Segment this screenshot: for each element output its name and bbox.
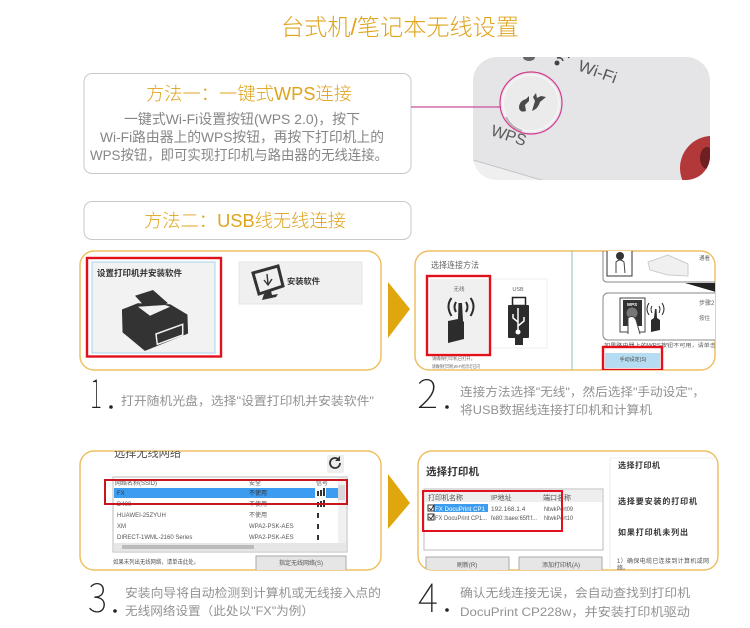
refresh button xyxy=(426,557,509,571)
step 3 caption: 安装向导将自动检测到计算机或无线接入点的 xyxy=(125,585,381,600)
step 1 caption: 打开随机光盘，选择"设置打印机并安装软件" xyxy=(121,393,374,408)
method one description xyxy=(90,111,388,163)
setup tile xyxy=(92,262,215,353)
icon: refresh xyxy=(327,455,344,473)
network table: HUAWEI-25ZYUH xyxy=(117,513,166,519)
top diagram xyxy=(603,250,716,292)
panel: method two heading xyxy=(84,202,411,240)
network table xyxy=(113,477,347,552)
step 2 caption: 连接方法选择"无线"，然后选择"手动设定"， xyxy=(460,384,705,399)
printer table: FX DocuPrint CP1... xyxy=(435,515,487,522)
method one description: Wi-Fi路由器上的WPS按钮，再按下打印机上的 xyxy=(100,129,384,145)
side help text: 选择要安装的打印机 xyxy=(618,496,697,506)
panel: step 3 screenshot: 选择无线网络 xyxy=(114,445,181,460)
manual setting button xyxy=(605,353,660,368)
icon: wireless router xyxy=(448,298,474,343)
network table: 不使用 xyxy=(249,511,267,519)
install tile xyxy=(239,262,362,304)
method one description: 一键式Wi-Fi设置按钮(WPS 2.0)，按下 xyxy=(124,111,360,127)
panel: step 2 screenshot xyxy=(415,250,733,370)
network table: 不使用 xyxy=(249,500,267,508)
panel: step 2 screenshot: 选择连接方法 xyxy=(431,260,479,270)
panel: step 1 screenshot: 安装软件 xyxy=(287,276,320,286)
printer table: 打印机名称 xyxy=(428,493,463,502)
panel: step 2 screenshot: 请确保打印机Wi-Fi指示灯已闪 xyxy=(432,363,480,370)
panel: step 2 screenshot: USB xyxy=(512,287,524,293)
step 3 caption: 3 xyxy=(88,568,107,624)
printer table: 192.168.1.4 xyxy=(491,506,526,513)
step 2 caption: 2 xyxy=(417,364,438,420)
add printer button: 添加打印机(A) xyxy=(542,561,580,569)
network table: 不使用 xyxy=(249,489,267,497)
panel: method one xyxy=(84,74,411,174)
icon: monitor with download arrow xyxy=(253,266,283,300)
panel: step 2 screenshot: 无线 xyxy=(453,285,465,293)
icon: USB plug xyxy=(508,298,529,345)
manual setting button: 手动设定(S) xyxy=(620,356,647,363)
callout line and circle xyxy=(411,72,562,134)
step 4 caption xyxy=(418,568,690,624)
panel: step 2 screenshot: 如果路由器上的WPS按钮不可用，请单击 xyxy=(604,342,716,349)
WPS step diagram: 步骤2 xyxy=(699,299,715,307)
panel: step 1 screenshot: 设置打印机并安装软件 xyxy=(97,268,182,278)
network table: 安全 xyxy=(249,479,261,487)
panel: step 2 screenshot: 请确保打印机已打开。 xyxy=(432,355,475,362)
specify network button xyxy=(256,556,346,571)
panel: step 4 screenshot: 选择打印机 xyxy=(426,465,480,478)
top diagram: 通看 xyxy=(699,254,711,262)
title: 台式机/笔记本无线设置 xyxy=(281,14,519,40)
panel: method two heading: 方法二：USB线无线连接 xyxy=(144,211,346,231)
panel: step 3 screenshot xyxy=(80,445,381,571)
printer table: NtwkPort10 xyxy=(544,515,573,522)
network table: WPA2-PSK-AES xyxy=(249,524,294,530)
arrow: step 1 to 2 xyxy=(388,282,410,338)
panel: step 3 screenshot: 如果未列出无线网络，请单击此处。 xyxy=(113,558,199,566)
network table: 信号 xyxy=(316,479,328,487)
panel: step 4 screenshot xyxy=(418,451,718,572)
network table: WPA2-PSK-AES xyxy=(249,535,294,541)
WPS step diagram: WPS xyxy=(627,302,637,307)
side help text xyxy=(610,458,718,572)
step 2 caption: 将USB数据线连接打印机和计算机 xyxy=(460,402,652,417)
icon: WPS arrows xyxy=(519,93,546,112)
step 4 caption: 4 xyxy=(418,568,438,624)
step 4 caption: DocuPrint CP228w，并安装打印机驱动 xyxy=(460,604,690,619)
side help text: 如果打印机未列出 xyxy=(618,527,688,537)
specify network button: 指定无线网络(S) xyxy=(279,559,323,567)
side help text: 1）确保电缆已连接到计算机或网 xyxy=(617,557,709,565)
icon: printer xyxy=(123,290,187,350)
network table: FX xyxy=(117,491,125,497)
side help text: 络。 xyxy=(617,564,629,572)
refresh button: 刷新(R) xyxy=(457,561,477,569)
printer table: 端口名称 xyxy=(543,493,571,502)
method one heading: 方法一：一键式WPS连接 xyxy=(146,84,352,104)
WPS step diagram: 按住 xyxy=(699,314,711,322)
network table: XM xyxy=(117,524,126,530)
step 1 caption xyxy=(90,364,374,420)
step 2 caption xyxy=(417,364,705,420)
WPS step diagram xyxy=(602,292,715,340)
side help text: 选择打印机 xyxy=(618,460,660,470)
step 3 caption xyxy=(88,568,381,624)
step 4 caption: 确认无线连接无误，会自动查找到打印机 xyxy=(460,585,690,600)
method one description: WPS按钮，即可实现打印机与路由器的无线连接。 xyxy=(90,147,388,163)
add printer button xyxy=(519,557,602,571)
photo: WPS button on printer: Wi-Fi xyxy=(576,58,619,87)
network table: D400 xyxy=(117,502,132,508)
network table: 网络名称(SSID) xyxy=(115,479,157,487)
printer table xyxy=(424,489,603,550)
panel: step 1 screenshot xyxy=(80,251,381,370)
arrow: step 3 to 4 xyxy=(388,474,410,529)
printer table: fe80::baee:65ff:f... xyxy=(491,515,537,522)
printer table: FX DocuPrint CP1 xyxy=(435,506,485,513)
step 3 caption: 无线网络设置（此处以"FX"为例） xyxy=(125,603,314,618)
printer table: NtwkPort09 xyxy=(544,506,573,513)
printer table: IP地址 xyxy=(491,493,512,502)
photo: WPS button on printer xyxy=(473,57,710,180)
step 1 caption: 1 xyxy=(90,364,102,420)
network table: DIRECT-1WML-2160 Series xyxy=(117,535,192,541)
photo: WPS button on printer: WPS xyxy=(489,123,528,150)
